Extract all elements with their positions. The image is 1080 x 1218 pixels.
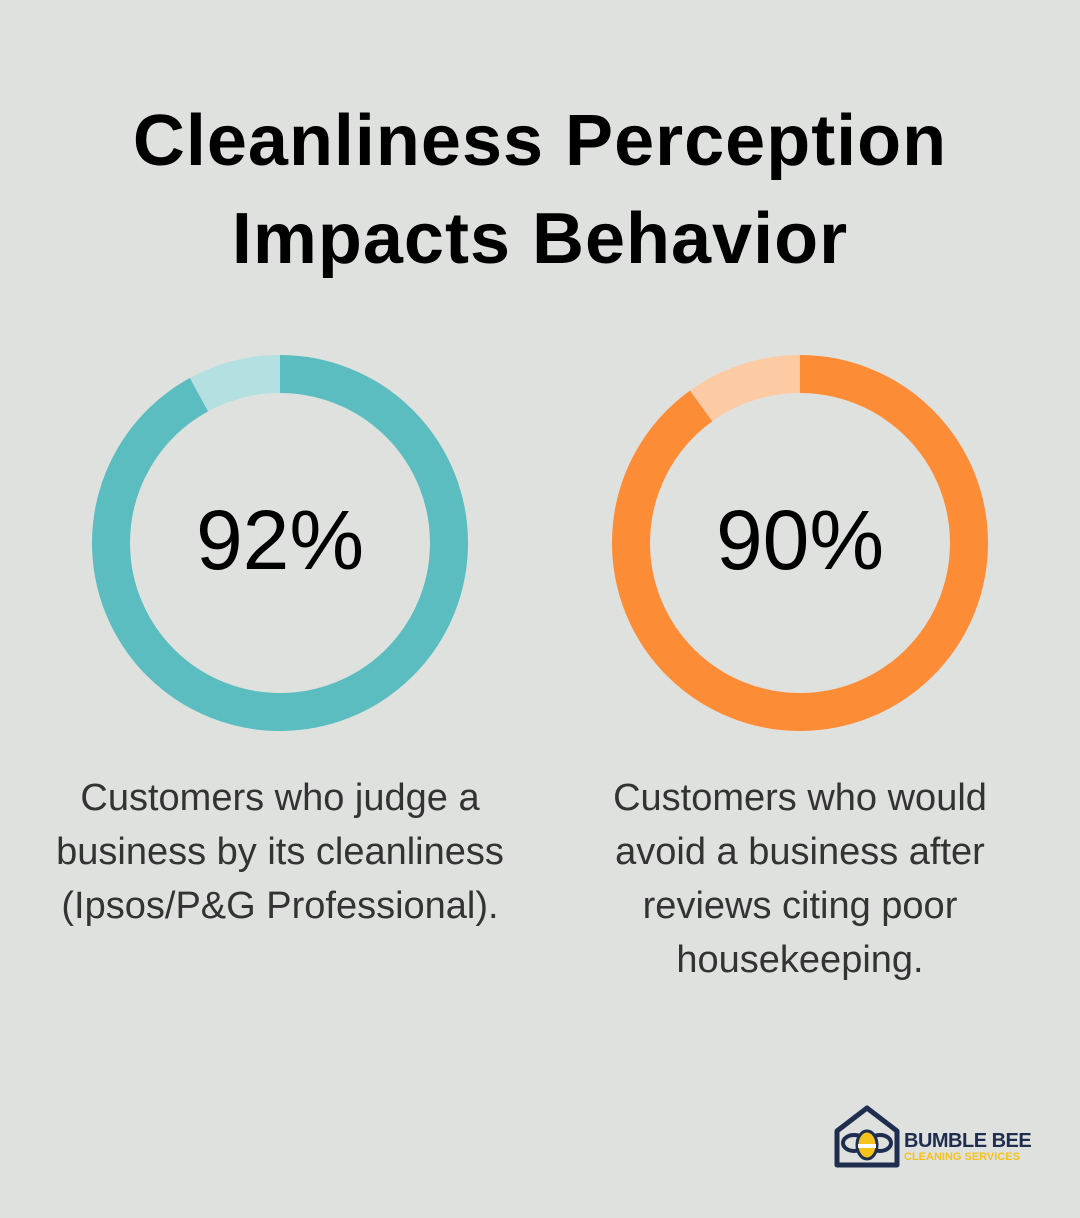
logo: CLEANING SERVICES bbox=[904, 1151, 1020, 1163]
stat number 90%: 90% bbox=[716, 493, 884, 587]
title: Impacts Behavior bbox=[232, 199, 848, 279]
donut chart: 92% bbox=[92, 355, 468, 731]
icon: bee house bbox=[834, 1105, 900, 1168]
caption left: Customers who judge a business by its cleanliness (Ipsos/P&G Professional). bbox=[56, 777, 504, 927]
donut chart: 90% bbox=[612, 355, 988, 731]
logo text: BUMBLE BEE bbox=[904, 1130, 1031, 1152]
stat number 92%: 92% bbox=[196, 493, 364, 587]
title: Cleanliness Perception bbox=[133, 101, 947, 181]
logo bbox=[834, 1105, 1031, 1168]
title bbox=[133, 101, 947, 279]
caption right: Customers who would avoid a business after reviews citing poor housekeeping. bbox=[613, 777, 987, 981]
